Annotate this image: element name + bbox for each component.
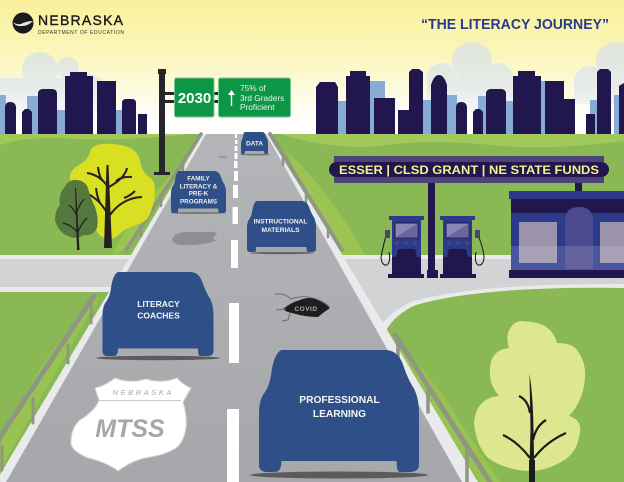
clouds — [0, 42, 624, 118]
logo: nebraska department of education: DEPARTMENT OF EDUCATION — [38, 30, 124, 36]
route shield: nebraska mtss: NEBRASKA — [112, 388, 172, 397]
car: data: DATA — [246, 140, 263, 148]
route shield: nebraska mtss: MTSS — [95, 415, 165, 443]
fuel pump: left — [381, 216, 424, 278]
car: family literacy and pre-k programs: FAMILY — [187, 176, 211, 182]
car: literacy coaches: COACHES — [137, 310, 180, 320]
highway sign: 2030: 2030 — [178, 90, 211, 107]
car: family literacy and pre-k programs: LITERACY & — [180, 184, 218, 190]
logo: nebraska department of education: NEBRASKA — [38, 12, 124, 28]
car: data — [240, 132, 270, 156]
grass — [0, 134, 624, 482]
car: literacy coaches: LITERACY — [137, 299, 180, 309]
road — [0, 134, 478, 482]
logo: nebraska department of education — [12, 12, 124, 36]
gas station canopy — [329, 156, 609, 278]
car: professional learning: PROFESSIONAL — [299, 395, 380, 406]
gas station building — [509, 183, 624, 278]
highway sign: 75% of 3rd graders proficient: Proficient — [240, 102, 275, 112]
car: instructional materials: MATERIALS — [262, 227, 300, 234]
car: instructional materials — [247, 201, 316, 254]
car: instructional materials: INSTRUCTIONAL — [254, 218, 307, 226]
icon: up arrow — [228, 90, 235, 106]
highway sign: 75% of 3rd graders proficient: 3rd Graders — [240, 93, 284, 103]
car: family literacy and pre-k programs — [170, 171, 226, 214]
highway sign: post — [154, 69, 219, 175]
tree: yellow-green — [70, 144, 155, 248]
highway sign: 75% of 3rd graders proficient — [218, 78, 290, 117]
highway sign: 2030 — [174, 78, 214, 117]
cross road — [0, 255, 624, 332]
car: family literacy and pre-k programs: PRE-K — [189, 190, 209, 198]
fuel pump: right — [440, 216, 484, 278]
pothole: covid: COVID — [294, 306, 318, 313]
tree: dark green — [55, 180, 98, 250]
car: family literacy and pre-k programs: PROGRAMS — [180, 198, 217, 206]
car: professional learning: LEARNING — [313, 409, 366, 420]
sky background — [0, 0, 624, 134]
small road mark — [219, 156, 227, 158]
tree: pale green — [474, 321, 585, 482]
guardrails — [0, 134, 490, 482]
gas station canopy: ESSER | CLSD GRANT | NE STATE FUNDS — [339, 163, 599, 177]
road patch shadow — [172, 232, 217, 245]
car: professional learning — [250, 350, 428, 478]
lane markings — [227, 134, 239, 482]
skyline: left — [0, 72, 147, 134]
skyline: right — [316, 69, 624, 134]
title: “THE LITERACY JOURNEY” — [421, 16, 609, 33]
pothole: covid — [275, 294, 330, 321]
route shield: nebraska mtss — [71, 378, 191, 471]
car: literacy coaches — [96, 272, 220, 360]
highway sign: 75% of 3rd graders proficient: 75% of — [240, 83, 267, 93]
